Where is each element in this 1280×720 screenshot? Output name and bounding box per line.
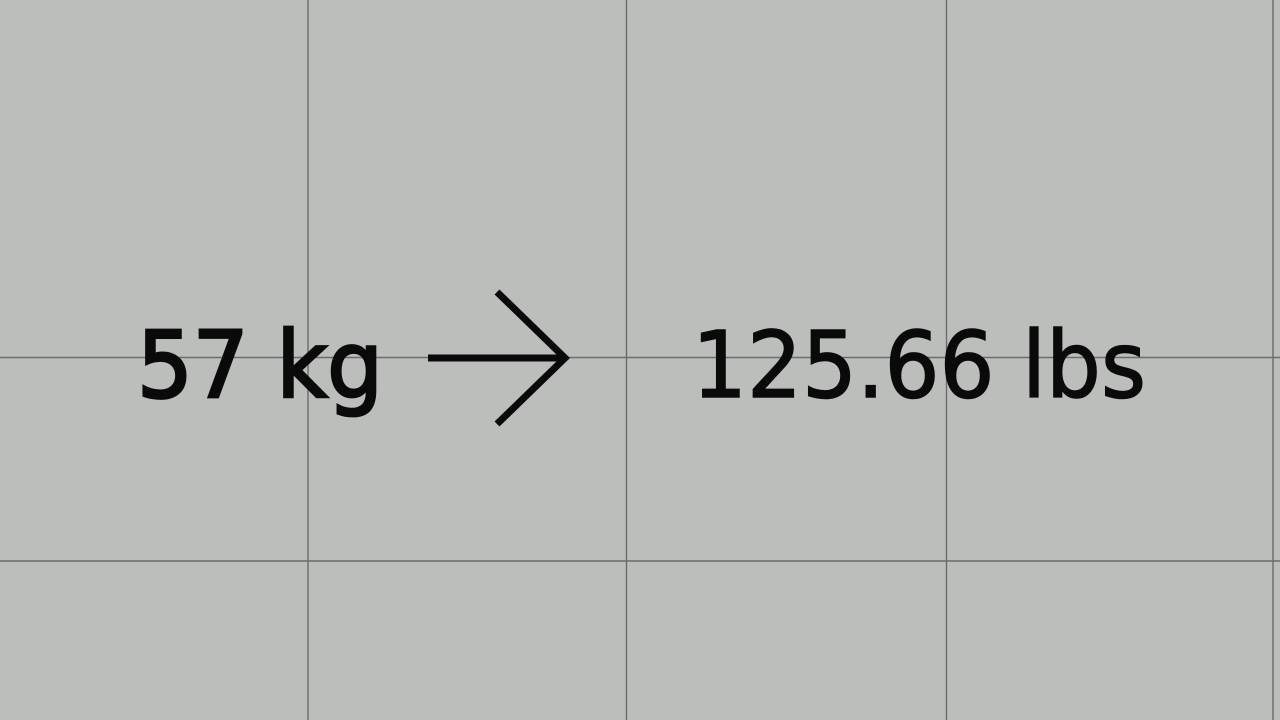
icon: right arrow	[428, 292, 565, 424]
conversion result: 125.66 lbs: 125.66 lbs	[692, 312, 1146, 419]
conversion input: 57 kg: 57 kg	[137, 312, 383, 419]
